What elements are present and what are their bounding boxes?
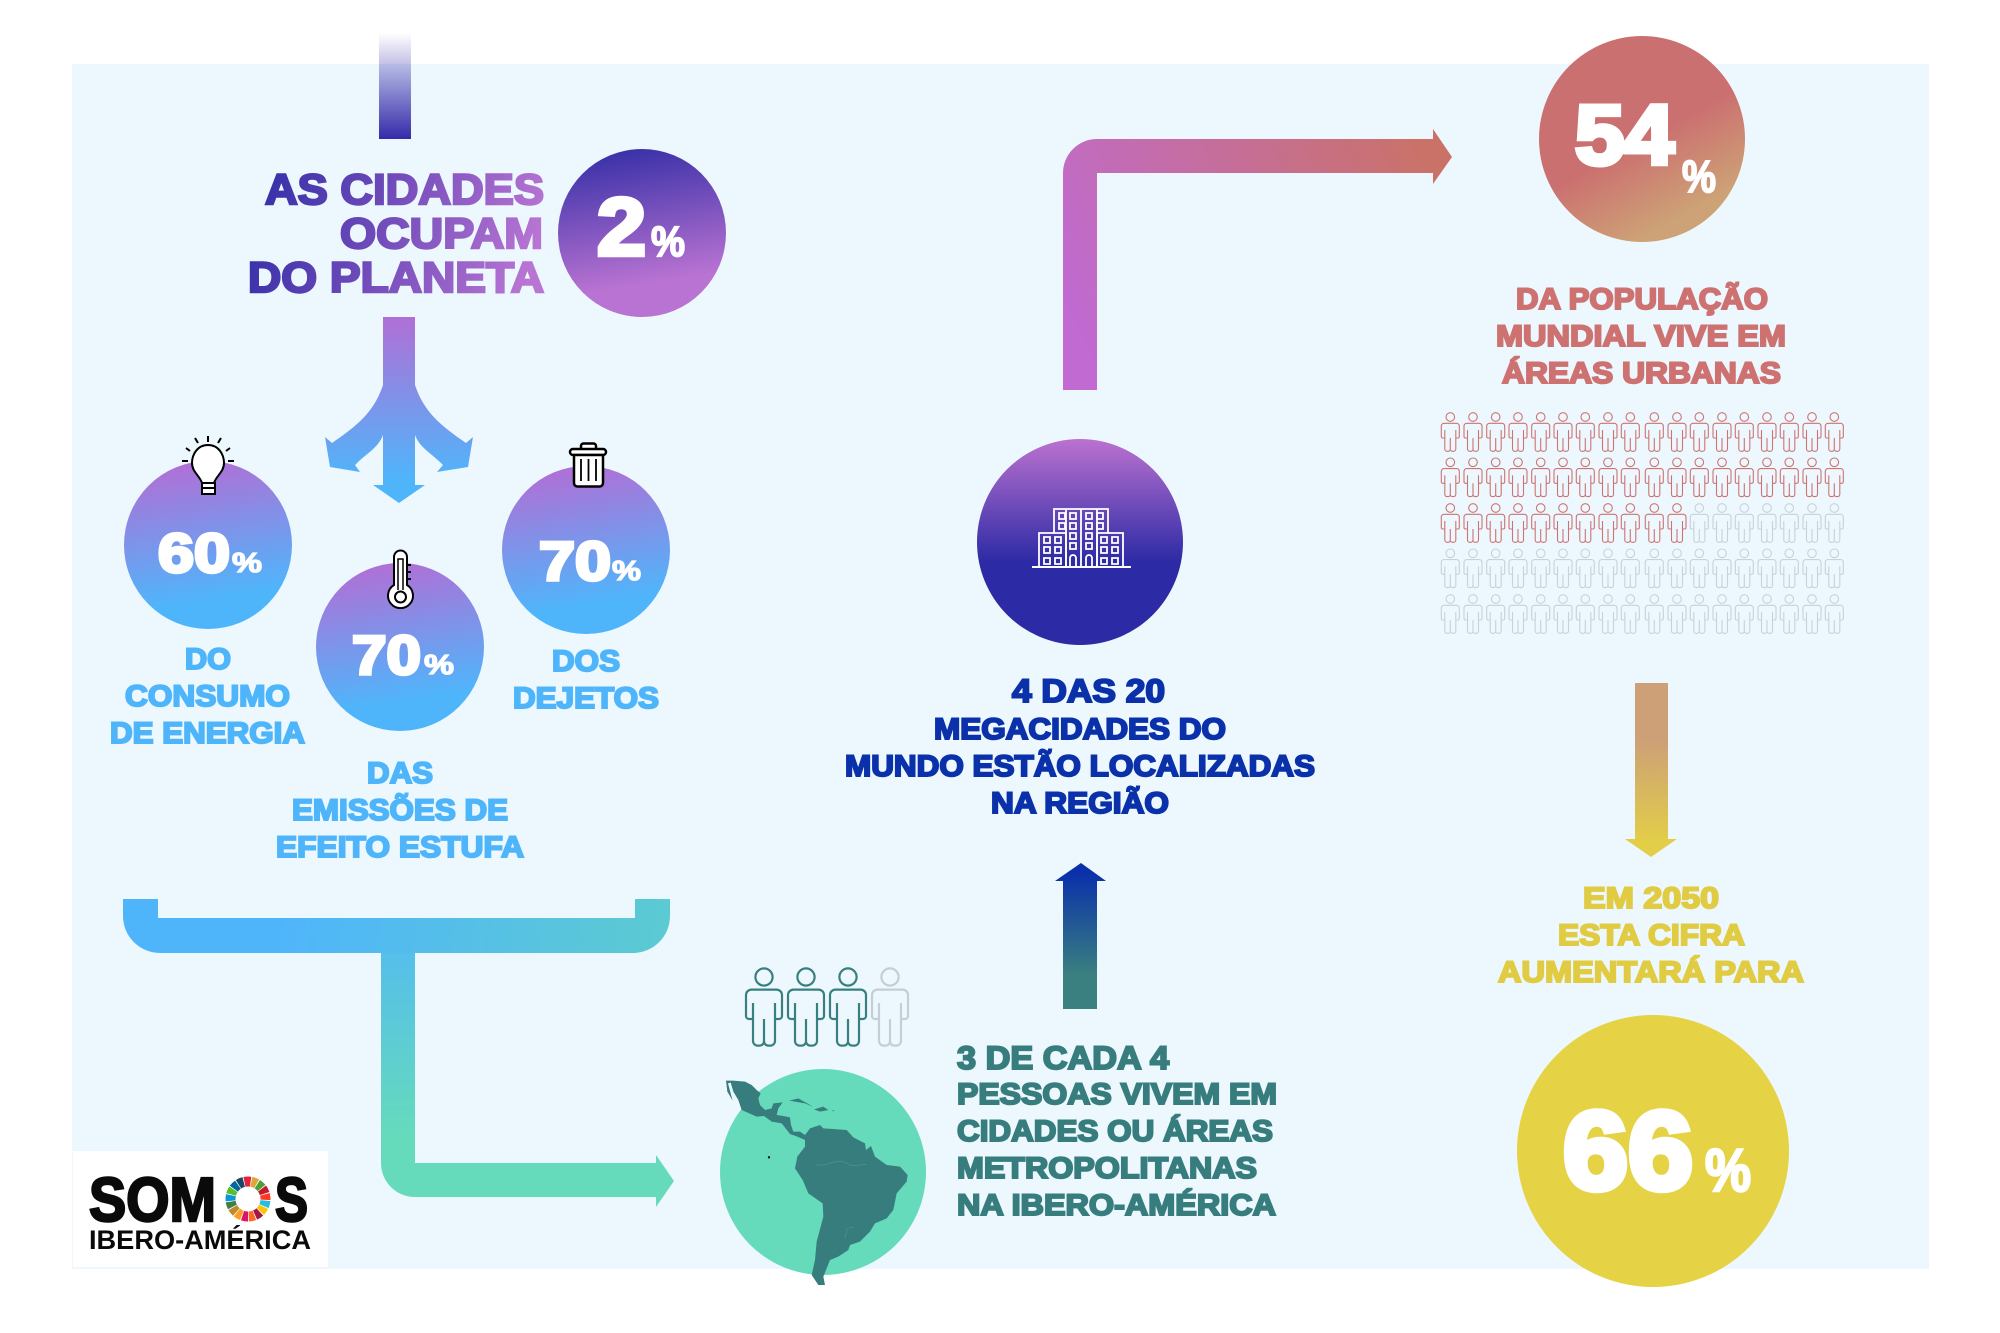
stat circle: 60% energy: %	[232, 547, 262, 578]
logo: somos ibero-america: S	[275, 1166, 308, 1235]
text: 4 das 20 megacidades: MEGACIDADES DO	[934, 713, 1226, 746]
text: 4 das 20 megacidades: NA REGIÃO	[991, 786, 1169, 820]
icon: four people, three highlighted	[746, 968, 908, 1046]
text: em 2050 esta cifra: AUMENTARÁ PARA	[1498, 955, 1804, 989]
circle: 66%	[1517, 1015, 1789, 1287]
logo: somos ibero-america: IBERO-AMÉRICA	[89, 1224, 311, 1255]
label: emissoes de efeito estufa: DAS	[367, 757, 433, 790]
icon: trash can	[570, 444, 606, 486]
label: consumo de energia: CONSUMO	[125, 680, 290, 713]
logo: somos ibero-america: SOM	[89, 1166, 216, 1235]
circle: 2%	[558, 149, 726, 317]
text: em 2050 esta cifra	[1498, 882, 1804, 989]
stat circle: 70% emissions: %	[424, 649, 454, 680]
pictogram: people grid 54 of 90	[1441, 413, 1843, 633]
circle: 2%: 2	[597, 182, 646, 273]
text: 3 de cada 4: 3 DE CADA 4	[957, 1040, 1169, 1076]
circle: 54%: %	[1682, 151, 1716, 202]
label: dejetos: DEJETOS	[513, 682, 659, 715]
heading: as cidades ocupam do planeta: DO PLANETA	[248, 254, 544, 302]
text: em 2050 esta cifra: ESTA CIFRA	[1558, 919, 1745, 952]
stat circle: 70% waste: 70	[539, 530, 611, 592]
stat circle: 70% waste	[502, 466, 670, 634]
text: em 2050 esta cifra: EM 2050	[1583, 882, 1719, 915]
arrow: three-way fork	[325, 317, 473, 503]
text: da populacao mundial: MUNDIAL VIVE EM	[1496, 320, 1786, 353]
arrow: top fading bar	[379, 33, 411, 139]
text: 3 de cada 4: METROPOLITANAS	[957, 1152, 1257, 1185]
arrow: elbow up and right to 54%	[1063, 129, 1452, 390]
text: 4 das 20 megacidades	[845, 673, 1315, 820]
icon: light bulb	[182, 436, 234, 494]
arrow: bracket leading to the map	[123, 899, 674, 1207]
stat circle: 60% energy	[124, 461, 292, 629]
arrow: up to megacities text	[1055, 863, 1106, 1009]
icon: thermometer	[388, 551, 413, 608]
label: emissoes de efeito estufa	[276, 757, 524, 864]
circle: 54%	[1539, 36, 1745, 242]
heading: as cidades ocupam do planeta	[248, 166, 544, 302]
globe with map of Latin America	[720, 1069, 926, 1285]
logo: somos ibero-america	[73, 1151, 328, 1267]
label: consumo de energia: DE ENERGIA	[110, 717, 305, 750]
text: da populacao mundial: ÁREAS URBANAS	[1502, 356, 1781, 390]
heading: as cidades ocupam do planeta: OCUPAM	[340, 210, 543, 258]
stat circle: 70% waste: %	[612, 555, 641, 586]
text: 3 de cada 4: PESSOAS VIVEM EM	[957, 1078, 1277, 1111]
text: 4 das 20 megacidades: 4 DAS 20	[1012, 673, 1165, 709]
label: consumo de energia: DO	[185, 643, 231, 676]
text: 3 de cada 4: NA IBERO-AMÉRICA	[957, 1188, 1276, 1222]
arrow: down to 2050 text	[1625, 683, 1677, 857]
label: dejetos: DOS	[552, 645, 620, 678]
text: da populacao mundial: DA POPULAÇÃO	[1516, 282, 1768, 316]
label: consumo de energia	[110, 643, 305, 750]
label: dejetos	[513, 645, 659, 715]
circle with buildings icon	[977, 439, 1183, 645]
text: 3 de cada 4: CIDADES OU ÁREAS	[957, 1114, 1273, 1148]
stat circle: 70% emissions	[316, 563, 484, 731]
text: 3 de cada 4	[957, 1040, 1277, 1222]
text: 4 das 20 megacidades: MUNDO ESTÃO LOCALIZADAS	[845, 749, 1315, 783]
circle: 54%: 54	[1575, 88, 1674, 182]
label: emissoes de efeito estufa: EFEITO ESTUFA	[276, 831, 524, 864]
stat circle: 60% energy: 60	[158, 522, 230, 584]
icon: buildings	[1032, 509, 1131, 567]
circle: 2%: %	[651, 218, 685, 266]
heading: as cidades ocupam do planeta: AS CIDADES	[265, 166, 544, 214]
stat circle: 70% emissions: 70	[352, 624, 421, 686]
circle: 66%: %	[1705, 1137, 1751, 1204]
label: emissoes de efeito estufa: EMISSÕES DE	[292, 793, 508, 827]
circle: 66%: 66	[1563, 1090, 1693, 1213]
text: da populacao mundial	[1496, 282, 1786, 390]
